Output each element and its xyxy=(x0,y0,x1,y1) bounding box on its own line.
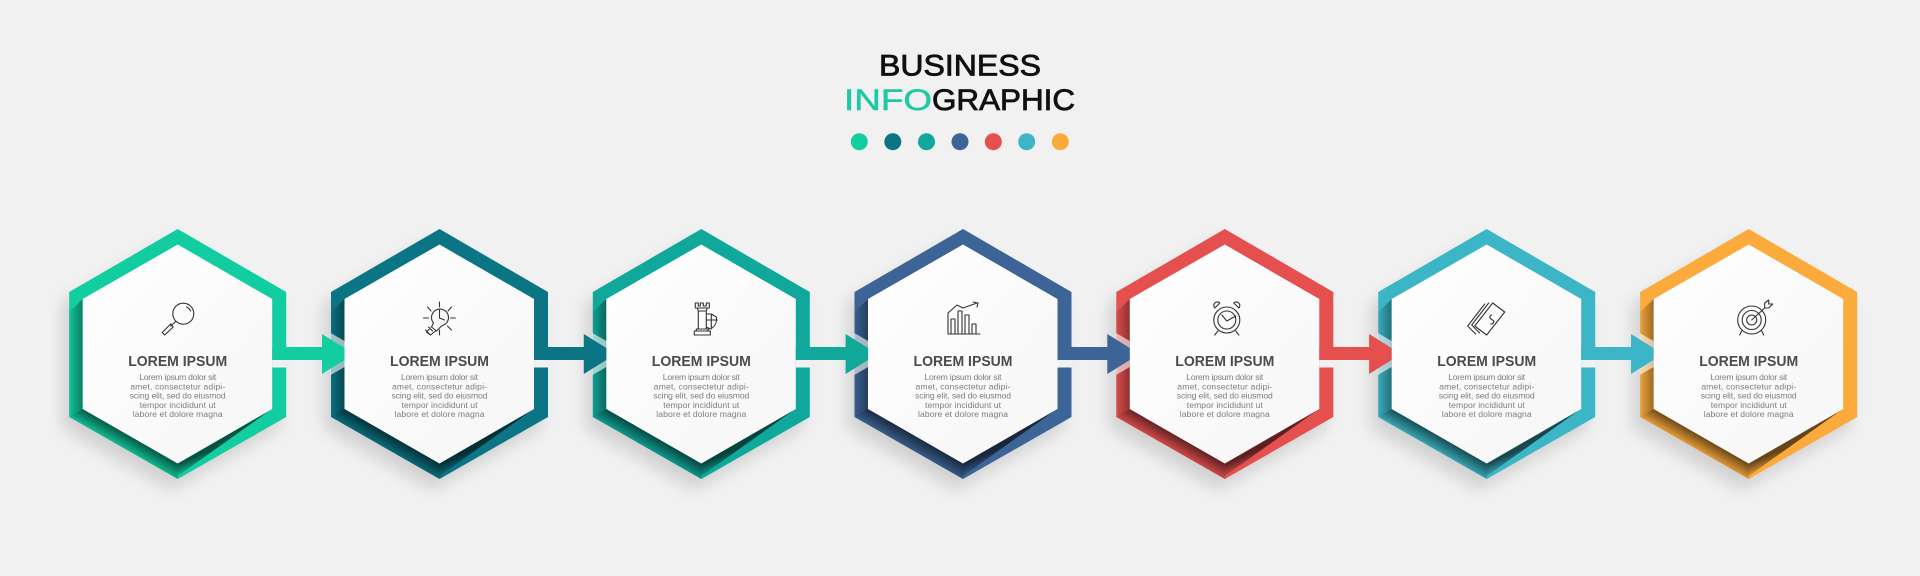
text block: labore et dolore magna xyxy=(1704,409,1794,419)
title: BUSINESS xyxy=(879,50,1041,82)
text block xyxy=(1177,372,1273,419)
text block: amet, consectetur adipi- xyxy=(654,381,749,391)
text block: tempor incididunt ut xyxy=(1449,400,1525,410)
text block: scing elit, sed do eiusmod xyxy=(1177,390,1273,400)
text block: labore et dolore magna xyxy=(656,409,747,419)
icon: chess rook and shield xyxy=(694,303,717,335)
panel: step 7 hexagon xyxy=(1633,229,1857,490)
text block: tempor incididunt ut xyxy=(1187,400,1263,410)
text block: Lorem ipsum dolor sit xyxy=(139,372,217,382)
arrow: step 3 to 4 xyxy=(796,333,868,375)
text block: scing elit, sed do eiusmod xyxy=(915,390,1011,400)
panel: step 5 hexagon xyxy=(1109,229,1334,490)
arrow: step 2 to 3 xyxy=(534,333,606,375)
text block: Lorem ipsum dolor sit xyxy=(1710,372,1788,382)
text block: amet, consectetur adipi- xyxy=(130,381,225,391)
text block xyxy=(653,372,750,419)
heading: LOREM IPSUM xyxy=(128,353,227,370)
text block: amet, consectetur adipi- xyxy=(392,381,487,391)
text block xyxy=(1701,372,1797,419)
arrow: step 5 to 6 xyxy=(1319,333,1392,375)
text block: tempor incididunt ut xyxy=(1711,400,1787,410)
title: INFO xyxy=(844,84,932,117)
text block: Lorem ipsum dolor sit xyxy=(401,372,479,382)
panel: step 4 hexagon xyxy=(848,229,1072,490)
arrow: step 1 to 2 xyxy=(272,333,344,375)
text block: tempor incididunt ut xyxy=(925,400,1002,410)
heading: LOREM IPSUM xyxy=(652,353,751,370)
text block: Lorem ipsum dolor sit xyxy=(1186,372,1264,382)
text block: scing elit, sed do eiusmod xyxy=(1439,390,1535,400)
title xyxy=(844,50,1075,117)
icon: magnifier xyxy=(162,303,194,335)
panel: step 2 hexagon xyxy=(324,229,549,490)
text block: labore et dolore magna xyxy=(1180,409,1270,419)
arrow: step 6 to 7 xyxy=(1581,333,1654,375)
panel: step 1 hexagon xyxy=(62,229,287,490)
icon: target with dart xyxy=(1738,300,1773,335)
text block: Lorem ipsum dolor sit xyxy=(663,372,740,382)
text block: labore et dolore magna xyxy=(394,409,485,419)
colour dots row xyxy=(851,133,1069,150)
text block: amet, consectetur adipi- xyxy=(1177,381,1272,391)
text block: scing elit, sed do eiusmod xyxy=(392,390,488,400)
heading: LOREM IPSUM xyxy=(390,353,489,370)
text block: tempor incididunt ut xyxy=(402,400,478,410)
text block: Lorem ipsum dolor sit xyxy=(924,372,1002,382)
text block: labore et dolore magna xyxy=(1442,409,1532,419)
text block: amet, consectetur adipi- xyxy=(916,381,1011,391)
text block: scing elit, sed do eiusmod xyxy=(653,390,750,400)
text block xyxy=(392,372,488,419)
heading: LOREM IPSUM xyxy=(914,353,1012,370)
text block: amet, consectetur adipi- xyxy=(1701,381,1796,391)
icon: alarm clock xyxy=(1214,302,1240,335)
heading: LOREM IPSUM xyxy=(1175,353,1274,370)
text block xyxy=(1439,372,1535,419)
icon: bar chart with arrow xyxy=(948,302,980,334)
panel: step 3 hexagon xyxy=(586,229,811,490)
heading: LOREM IPSUM xyxy=(1699,353,1798,370)
arrow: step 4 to 5 xyxy=(1058,333,1130,375)
text block: scing elit, sed do eiusmod xyxy=(1701,390,1797,400)
text block: tempor incididunt ut xyxy=(140,400,216,410)
text block: labore et dolore magna xyxy=(918,409,1008,419)
text block xyxy=(130,372,226,419)
title: GRAPHIC xyxy=(932,84,1075,117)
icon: light bulb xyxy=(424,302,456,335)
text block: amet, consectetur adipi- xyxy=(1439,381,1534,391)
text block: labore et dolore magna xyxy=(133,409,223,419)
icon: stack of banknotes xyxy=(1468,303,1505,335)
heading: LOREM IPSUM xyxy=(1437,353,1536,370)
panel: step 6 hexagon xyxy=(1371,229,1596,490)
text block: Lorem ipsum dolor sit xyxy=(1448,372,1526,382)
text block: scing elit, sed do eiusmod xyxy=(130,390,226,400)
text block: tempor incididunt ut xyxy=(663,400,740,410)
text block xyxy=(915,372,1011,419)
